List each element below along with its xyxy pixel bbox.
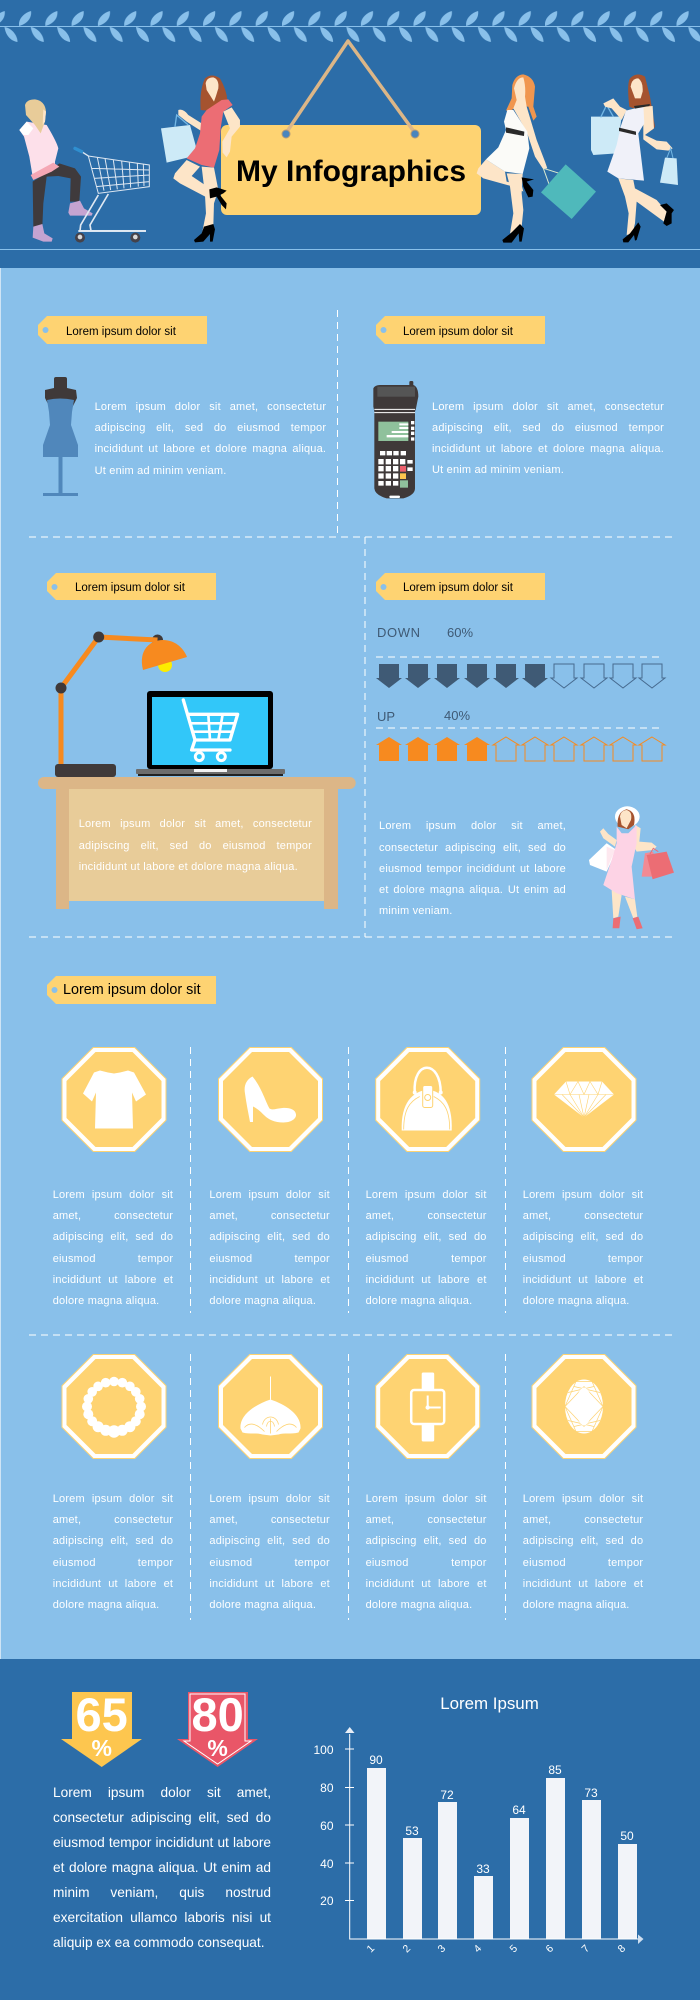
figure: woman in white dress with teal bag — [477, 74, 596, 243]
text block: incididunt ut labore et — [53, 1274, 173, 1286]
icon: handbag badge — [375, 1047, 480, 1152]
text block — [53, 1780, 271, 1960]
bar chart: 100 — [313, 1743, 334, 1757]
text block: dolore magna aliqua. — [523, 1599, 630, 1611]
text block: adipiscing elit, sed do — [209, 1535, 330, 1547]
text block: Lorem ipsum dolor sit amet, consectetur — [95, 401, 326, 413]
tag heading: Lorem ipsum dolor sit — [66, 326, 177, 338]
text block: dolore magna aliqua. — [209, 1295, 316, 1307]
text block: amet, consectetur — [209, 1514, 330, 1526]
section: desk with laptop — [38, 573, 356, 909]
text block: dolore magna aliqua. — [53, 1295, 159, 1307]
text block: amet, consectetur — [366, 1210, 487, 1222]
text block: minim veniam, quis nostrud — [53, 1885, 271, 1900]
pictogram: up arrows 4 of 10 — [376, 737, 665, 761]
text block — [523, 1185, 643, 1313]
text block: Lorem ipsum dolor sit amet, — [53, 1784, 271, 1800]
figure: woman in red dress — [161, 75, 240, 242]
text block: eiusmod tempor — [209, 1557, 330, 1569]
text block: incididunt ut labore et — [523, 1578, 643, 1590]
section: payment terminal note — [373, 316, 664, 498]
text block — [366, 1185, 487, 1313]
tag heading — [376, 316, 545, 344]
text block: aliquip ex ea commodo consequat. — [53, 1935, 265, 1950]
text block: et dolore magna aliqua. Ut enim ad — [379, 884, 566, 896]
section: dress form note — [38, 316, 326, 496]
label: down 60%: 60% — [447, 625, 473, 640]
pictogram: down arrows 6 of 10 — [376, 664, 665, 688]
tag heading — [376, 573, 545, 600]
text block: Lorem ipsum dolor sit — [53, 1493, 173, 1505]
bar chart: 40 — [320, 1857, 334, 1871]
text block: adipiscing elit, sed do — [53, 1231, 173, 1243]
callout: 80 percent arrow: % — [207, 1735, 228, 1761]
tag heading — [38, 316, 207, 344]
text block: Lorem ipsum dolor sit — [209, 1189, 330, 1201]
text block: amet, consectetur — [523, 1514, 643, 1526]
text block: eiusmod tempor — [523, 1557, 643, 1569]
text block: amet, consectetur — [53, 1514, 173, 1526]
figure: blonde shopper with cart — [19, 99, 149, 243]
callout: 65 percent arrow: % — [91, 1735, 112, 1761]
text block: amet, consectetur — [523, 1210, 643, 1222]
bar chart: 7 — [580, 1942, 592, 1955]
text block: eiusmod tempor — [53, 1253, 173, 1265]
text block: incididunt ut labore et — [366, 1274, 487, 1286]
panel: header banner — [0, 0, 700, 268]
text block: eiusmod tempor incididunt ut labore — [53, 1835, 271, 1850]
text block: minim veniam. — [379, 905, 453, 917]
label: down 60% — [377, 625, 473, 640]
tag heading: Lorem ipsum dolor sit — [63, 982, 201, 998]
icon: wristwatch badge — [375, 1354, 480, 1459]
desk — [38, 777, 356, 909]
text block: et dolore magna aliqua. Ut enim ad — [53, 1860, 271, 1875]
bar chart: 64 — [512, 1803, 526, 1817]
label: up 40% — [377, 708, 470, 724]
bar chart: 85 — [548, 1763, 562, 1777]
section: product grid — [47, 976, 643, 1617]
text block: dolore magna aliqua. — [53, 1599, 159, 1611]
text block: adipiscing elit, sed do — [209, 1231, 330, 1243]
icon: t-shirt badge — [62, 1047, 166, 1152]
text block: incididunt ut labore et — [366, 1578, 487, 1590]
panel: footer with stats and chart — [0, 1659, 700, 2000]
text block: exercitation ullamco laboris nisi ut — [53, 1910, 271, 1925]
text block: amet, consectetur — [209, 1210, 330, 1222]
icon: oval gem badge — [532, 1354, 636, 1459]
text block: consectetur adipiscing elit, sed do — [53, 1810, 271, 1825]
text block: dolore magna aliqua. — [209, 1599, 316, 1611]
text block: incididunt ut labore et — [523, 1274, 643, 1286]
text block: consectetur adipiscing elit, sed do — [379, 842, 566, 854]
figure: woman in pink with shopping bags — [589, 806, 674, 929]
text block: adipiscing elit, sed do eiusmod tempor — [432, 422, 664, 434]
text block: dolore magna aliqua. — [366, 1295, 472, 1307]
text block: incididunt ut labore et dolore magna aliqua. — [432, 443, 664, 455]
bar chart: 73 — [584, 1786, 598, 1800]
icon: dress form mannequin — [43, 377, 78, 496]
leaf garland — [0, 11, 700, 42]
bar chart: 8 — [616, 1942, 628, 1955]
text block — [53, 1489, 173, 1617]
icon: desk lamp — [55, 632, 187, 777]
label: down 60%: DOWN — [377, 625, 421, 640]
figure: woman in pale dress with two bags — [591, 75, 678, 242]
icon: jeweled pendant badge — [218, 1354, 323, 1459]
text block: eiusmod tempor — [523, 1253, 643, 1265]
bar chart: 72 — [440, 1788, 454, 1802]
label: up 40%: 40% — [444, 708, 470, 723]
bar chart: 50 — [620, 1829, 634, 1843]
title: My Infographics — [236, 155, 466, 188]
text block: adipiscing elit, sed do — [366, 1231, 487, 1243]
tag heading: Lorem ipsum dolor sit — [75, 582, 186, 594]
bar chart: 4 — [472, 1942, 484, 1955]
text block: Lorem ipsum dolor sit — [366, 1493, 487, 1505]
bar chart: 6 — [544, 1942, 556, 1955]
text block: adipiscing elit, sed do — [523, 1231, 643, 1243]
bar chart: 33 — [476, 1862, 490, 1876]
icon: diamond badge — [532, 1047, 636, 1152]
callout: 65 percent arrow: 65 — [76, 1688, 128, 1741]
tag heading: Lorem ipsum dolor sit — [403, 582, 514, 594]
text block: dolore magna aliqua. — [523, 1295, 630, 1307]
bar chart: 80 — [320, 1781, 334, 1795]
label: up 40%: UP — [377, 709, 395, 724]
text block — [523, 1489, 643, 1617]
text block: Lorem ipsum dolor sit — [523, 1189, 643, 1201]
desk text: incididunt ut labore et dolore magna aliqua. — [79, 861, 298, 873]
desk text: adipiscing elit, sed do eiusmod tempor — [79, 840, 312, 852]
tag heading — [47, 573, 216, 600]
text block — [95, 397, 326, 487]
chart title: Lorem Ipsum — [440, 1694, 539, 1713]
text block: Lorem ipsum dolor sit — [209, 1493, 330, 1505]
panel: main light blue content — [0, 268, 700, 1659]
bar chart: 90 — [369, 1753, 383, 1767]
callout: 80 percent arrow — [177, 1688, 258, 1767]
text block: incididunt ut labore et — [209, 1578, 330, 1590]
text block: Lorem ipsum dolor sit — [366, 1189, 487, 1201]
callout: 65 percent arrow — [61, 1688, 142, 1767]
text block — [53, 1185, 173, 1313]
bar chart: 2 — [401, 1942, 413, 1955]
section: up and down statistics — [376, 573, 674, 929]
text block: Lorem ipsum dolor sit amet, — [379, 820, 566, 832]
text block — [379, 816, 566, 924]
text block: amet, consectetur — [366, 1514, 487, 1526]
bar chart: 3 — [436, 1942, 448, 1955]
icon: high heel badge — [218, 1047, 323, 1152]
text block: Lorem ipsum dolor sit — [523, 1493, 643, 1505]
bar chart — [313, 1727, 644, 1955]
bar chart: 20 — [320, 1894, 334, 1908]
text block — [209, 1185, 330, 1313]
icon: pearl necklace badge — [62, 1354, 166, 1459]
text block: eiusmod tempor — [209, 1253, 330, 1265]
text block — [432, 396, 664, 486]
icon: laptop with shopping cart — [136, 691, 285, 776]
bar chart: 1 — [365, 1942, 377, 1955]
tag heading: Lorem ipsum dolor sit — [403, 326, 514, 338]
tag heading — [47, 976, 216, 1004]
text block: Ut enim ad minim veniam. — [432, 464, 564, 476]
text block: Ut enim ad minim veniam. — [95, 465, 227, 477]
text block: adipiscing elit, sed do — [53, 1535, 173, 1547]
text block: eiusmod tempor — [366, 1253, 487, 1265]
bar chart: 53 — [405, 1824, 419, 1838]
desk text: Lorem ipsum dolor sit amet, consectetur — [79, 818, 312, 830]
text block: eiusmod tempor — [366, 1557, 487, 1569]
callout: 80 percent arrow: 80 — [191, 1688, 244, 1741]
text block: incididunt ut labore et dolore magna aliqua. — [95, 443, 326, 455]
hanging sign with title — [221, 41, 481, 215]
text block: dolore magna aliqua. — [366, 1599, 472, 1611]
bar chart: 5 — [508, 1942, 520, 1955]
text block — [366, 1489, 487, 1617]
text block: Lorem ipsum dolor sit — [53, 1189, 173, 1201]
text block: incididunt ut labore et — [209, 1274, 330, 1286]
text block — [209, 1489, 330, 1617]
icon: card payment terminal — [373, 381, 418, 498]
text block: Lorem ipsum dolor sit amet, consectetur — [432, 400, 664, 412]
text block: adipiscing elit, sed do eiusmod tempor — [95, 422, 326, 434]
bar chart: 60 — [320, 1819, 334, 1833]
text block: eiusmod tempor — [53, 1557, 173, 1569]
text block: amet, consectetur — [53, 1210, 173, 1222]
text block: adipiscing elit, sed do — [366, 1535, 487, 1547]
text block: eiusmod tempor incididunt ut labore — [379, 863, 566, 875]
text block: adipiscing elit, sed do — [523, 1535, 643, 1547]
desk text — [79, 814, 312, 880]
text block: incididunt ut labore et — [53, 1578, 173, 1590]
